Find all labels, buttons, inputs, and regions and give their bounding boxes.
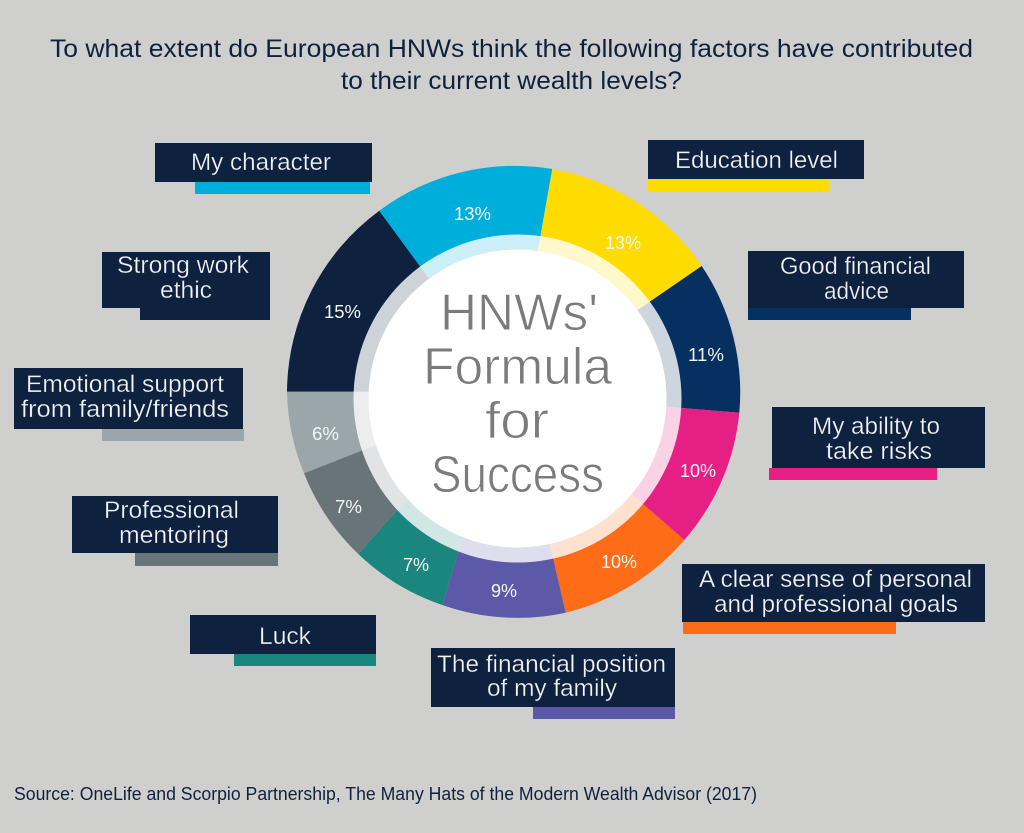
segment: good financial advice 11% [518,266,740,413]
label: emotional support: from family/friends [21,396,229,423]
segment: good financial advice 11%: 11% [688,345,724,365]
label: education level [648,140,864,192]
label: education level: Education level [675,147,838,174]
label: personal and professional goals [682,564,985,634]
segment: emotional support 6%: 6% [312,424,339,444]
label: financial position of my family [431,648,675,719]
white centre circle [368,250,666,548]
centre heading: Success [431,446,604,504]
segment: ability to take risks 10%: 10% [680,461,716,481]
label: good financial advice [748,251,964,320]
label: professional mentoring [72,496,278,566]
segment: strong work ethic 15%: 15% [324,302,361,322]
translucent inner ring [354,234,682,562]
segment: luck 7%: 7% [403,555,429,575]
label: good financial advice: Good financial [780,253,931,280]
source note: Source: OneLife and Scorpio Partnership, The Many Hats of the Modern Wealth Advisor (2017) [14,784,757,804]
segment: luck 7% [358,398,518,605]
label: emotional support: Emotional support [26,371,224,398]
segment: emotional support 6% [287,392,518,473]
segment: personal and professional goals 10% [518,398,684,613]
label: luck: Luck [259,623,312,650]
segment: financial position of family 9% [442,398,566,618]
segment: education level 13%: 13% [605,233,641,253]
segment: my character 13%: 13% [454,204,491,224]
label: ability to take risks: take risks [826,438,932,465]
label: emotional support [14,368,244,441]
segment: professional mentoring 7% [304,398,518,554]
segment: professional mentoring 7%: 7% [335,497,362,517]
label: professional mentoring: mentoring [119,522,229,549]
centre heading: Formula [423,338,612,396]
label: financial position of my family: of my family [487,675,617,702]
title [50,35,973,95]
label: good financial advice: advice [824,278,889,305]
label: personal and professional goals: A clear sense of personal [699,566,972,593]
label: ability to take risks: My ability to [812,413,940,440]
label: financial position of my family: The financial position [437,651,666,678]
segment: education level 13% [518,169,702,398]
title: To what extent do European HNWs think the following factors have contributed [50,35,973,63]
centre heading: HNWs' [440,284,598,342]
label: professional mentoring: Professional [104,497,239,524]
donut chart [287,166,740,618]
title: to their current wealth levels? [341,67,682,95]
centre heading [423,284,612,504]
segment: my character 13% [379,166,552,398]
label: luck [190,615,376,666]
label: strong work ethic: Strong work [117,252,250,279]
label: strong work ethic: ethic [160,277,212,304]
label: personal and professional goals: and professional goals [714,591,958,618]
centre heading: for [485,392,549,450]
segment: ability to take risks 10% [518,398,739,540]
segment: personal and professional goals 10%: 10% [601,552,637,572]
label: strong work ethic [102,252,270,320]
label: my character: My character [191,149,331,176]
label: ability to take risks [769,407,985,480]
segment: strong work ethic 15% [287,211,518,398]
label: my character [155,143,372,194]
segment: financial position of family 9%: 9% [491,581,517,601]
